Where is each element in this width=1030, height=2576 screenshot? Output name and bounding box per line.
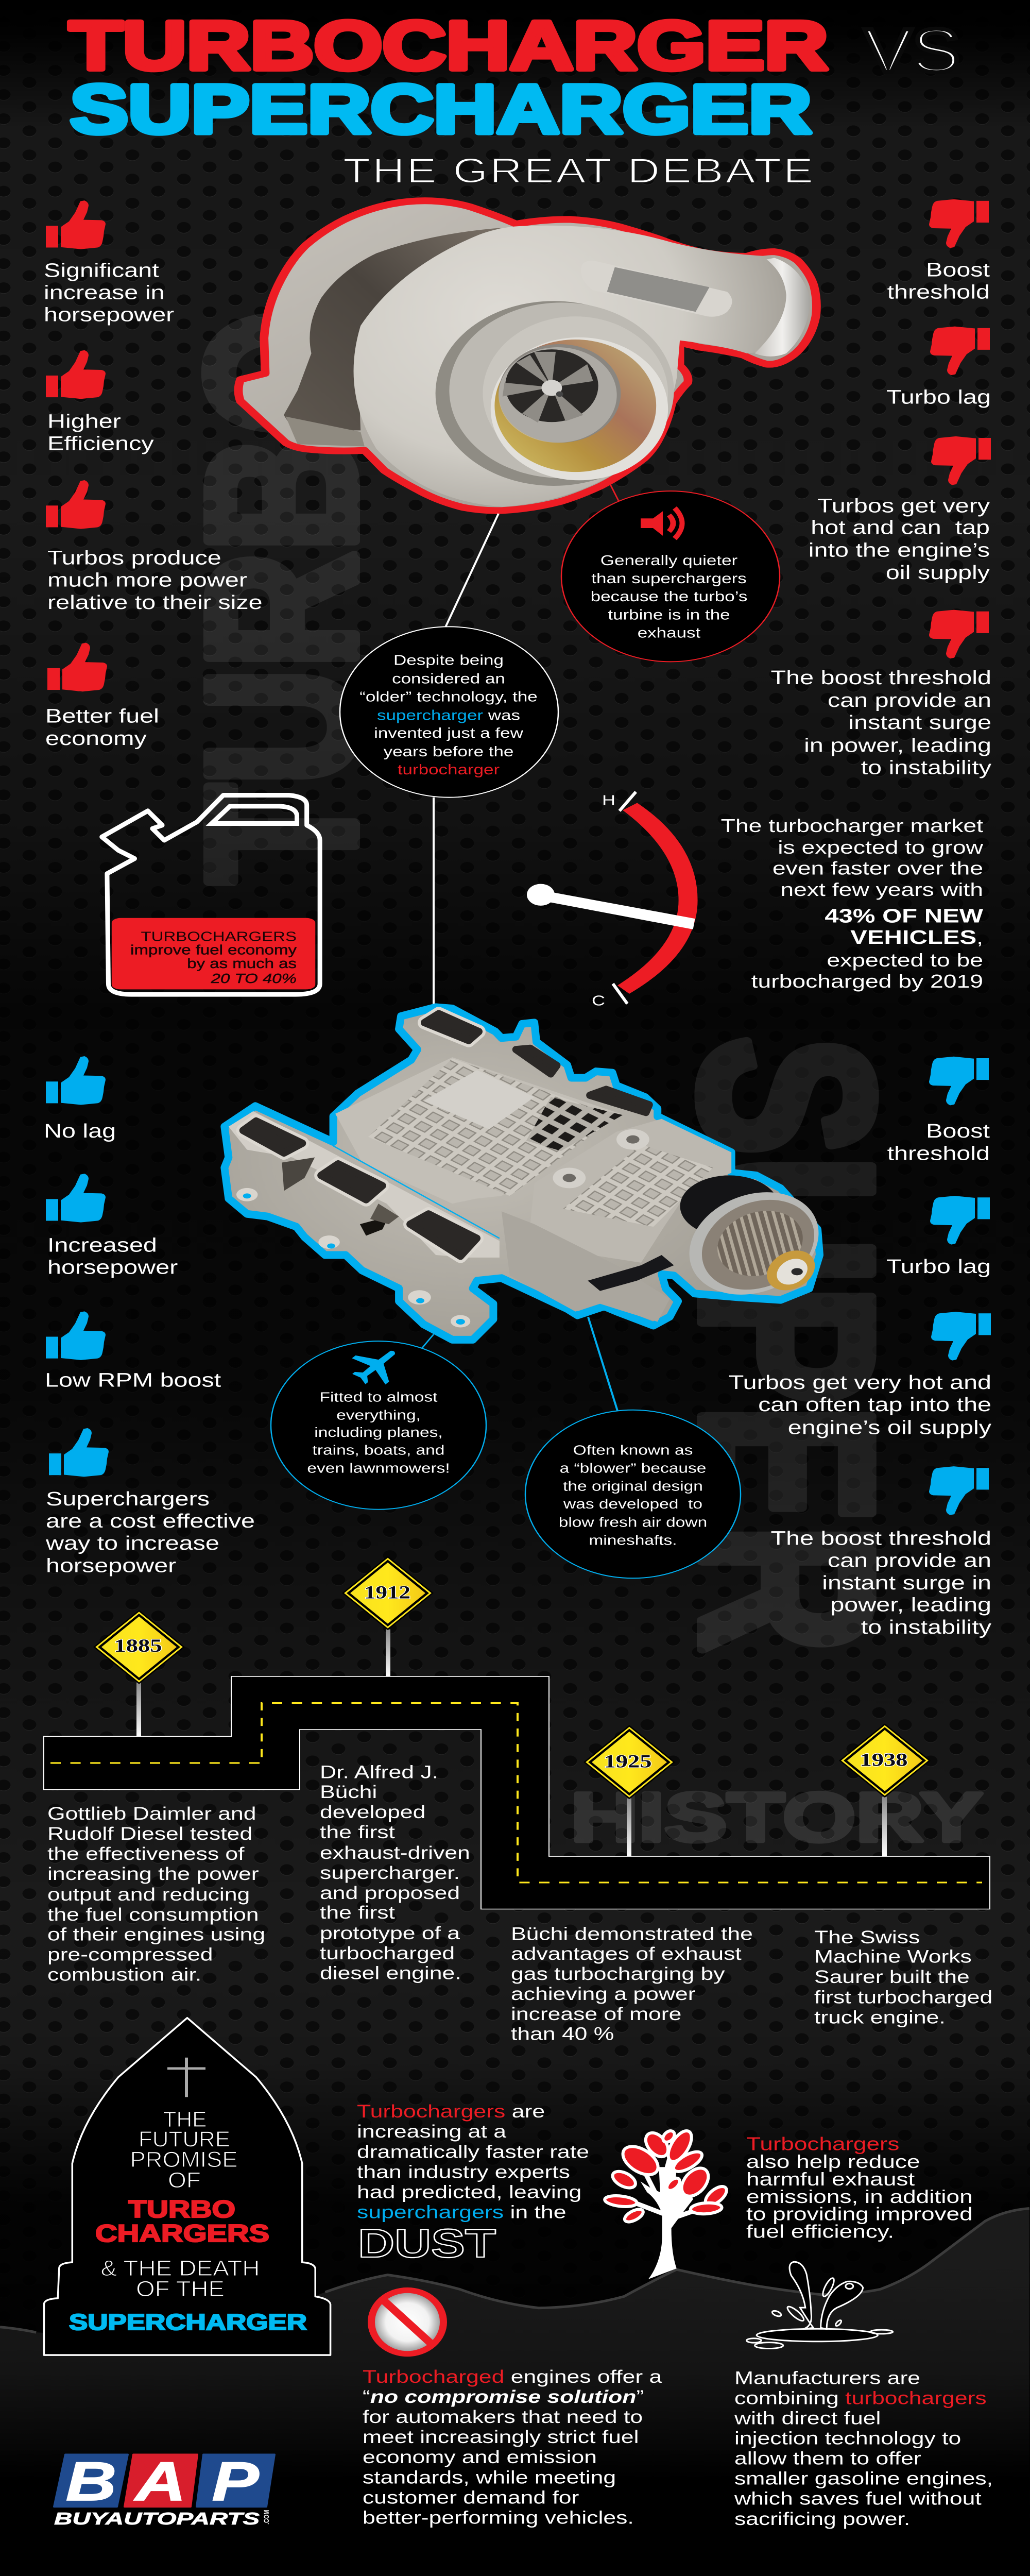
market growth text: 43% OF NEW	[825, 905, 984, 927]
callout text: older technology: “older” technology, the	[359, 689, 538, 705]
tombstone text: turbo chargers: CHARGERS	[95, 2220, 269, 2247]
icon: thumb down	[929, 199, 989, 248]
market growth text: The turbocharger market	[721, 815, 984, 836]
turbocharger photo illustration	[238, 201, 816, 511]
callout text: fitted: trains, boats, and	[313, 1443, 444, 1458]
tombstone	[44, 2018, 331, 2355]
gauge	[527, 792, 698, 1009]
history text: 1912: turbocharged	[320, 1944, 455, 1963]
fuel can text: by as much as	[187, 956, 297, 971]
panel: supercharger pros and cons	[44, 1056, 991, 1638]
text: turbochargers increasing: Turbochargers are	[357, 2102, 545, 2122]
milestone sign: 1885: 1885	[114, 1635, 162, 1656]
callout text: blower: was developed to	[563, 1497, 702, 1512]
icon: cross	[167, 2058, 205, 2097]
callout text: older technology: invented just a few	[374, 725, 523, 741]
text: direct injection: Manufacturers are	[734, 2368, 920, 2388]
history text: 1938: first turbocharged	[814, 1988, 992, 2007]
callout text: fitted: even lawnmowers!	[307, 1461, 450, 1476]
text: no compromise solution: better-performing vehicles.	[363, 2508, 634, 2528]
milestone sign: 1925: 1925	[604, 1751, 651, 1771]
text: no compromise solution: economy and emission	[363, 2448, 597, 2467]
intake ports	[243, 1013, 649, 1256]
callout text: older technology: Despite being	[393, 652, 504, 668]
history text: 1938: Machine Works	[814, 1947, 972, 1967]
callout text: blower: the original design	[563, 1479, 703, 1494]
intake port rims	[243, 1013, 479, 1256]
icon: thumb up	[46, 200, 106, 249]
market growth text: next few years with	[780, 879, 983, 900]
pro: increased horsepower: horsepower	[47, 1257, 178, 1278]
market growth text: turbocharged by 2019	[751, 971, 983, 992]
callout text: quieter: than superchargers	[591, 571, 747, 586]
icon: thumb down	[931, 436, 991, 485]
history text: 1925: increase of more	[511, 2005, 681, 2024]
text: direct injection: injection technology to	[734, 2429, 961, 2448]
text: reduce emissions: harmful exhaust	[746, 2169, 915, 2190]
callout text: older technology: supercharger was	[377, 707, 520, 723]
callout text: quieter: Generally quieter	[600, 552, 737, 568]
text: direct injection: with direct fuel	[734, 2409, 881, 2428]
milestone sign: 1912	[343, 1557, 433, 1676]
text: turbochargers increasing: had predicted, leaving	[357, 2182, 581, 2202]
supercharger photo illustration	[225, 1007, 840, 1340]
con: heat and oil: can often tap into the	[758, 1394, 991, 1416]
text: turbochargers increasing: than industry experts	[357, 2162, 570, 2182]
pro: cost effective: way to increase	[45, 1533, 219, 1554]
pro: horsepower: Significant	[44, 260, 159, 281]
fuel can text: 20 TO 40%	[211, 971, 297, 986]
pro: fuel economy: Better fuel	[45, 705, 159, 727]
con: heat and oil: Turbos get very	[817, 495, 990, 517]
callout text: blower: Often known as	[573, 1443, 693, 1458]
callout text: blower: mineshafts.	[589, 1533, 677, 1548]
text: direct injection: sacrificing power.	[734, 2509, 910, 2529]
text: no compromise solution: Turbocharged engines offer a	[363, 2367, 662, 2387]
pro: cost effective: horsepower	[46, 1555, 176, 1577]
history text: 1885: of their engines using	[47, 1925, 265, 1944]
con: boost threshold: threshold	[887, 1143, 990, 1164]
history text: 1912: and proposed	[320, 1883, 460, 1903]
text: turbochargers increasing: dramatically faster rate	[357, 2142, 589, 2162]
history text: 1912: Dr. Alfred J.	[320, 1762, 438, 1782]
con: heat and oil: hot and can tap	[811, 517, 990, 538]
line: turbo to history callout	[445, 514, 499, 627]
milestone sign: 1938	[840, 1724, 930, 1856]
market growth text: expected to be	[827, 950, 983, 971]
callout: fitted to almost everything	[271, 1338, 486, 1510]
icon: thumb down	[930, 327, 990, 375]
callout text: older technology: years before the	[384, 744, 513, 759]
icon: thumb up	[46, 480, 106, 529]
con: turbo lag: Turbo lag	[886, 1256, 991, 1278]
line: supercharger to fitted callout	[422, 1334, 434, 1348]
history text: 1885: combustion air.	[47, 1965, 201, 1985]
history text: 1912: developed	[320, 1802, 425, 1822]
pro: power to size: relative to their size	[47, 592, 263, 614]
pro: horsepower: increase in	[44, 282, 164, 303]
ghost word: HISTORY: HISTORY	[571, 1778, 983, 1856]
icon: thumb up	[46, 1056, 106, 1105]
text: turbochargers increasing: increasing at a	[357, 2122, 507, 2142]
icon: thumb down	[931, 1312, 991, 1361]
pro: efficiency: Efficiency	[47, 433, 154, 454]
con: instability: power, leading	[830, 1594, 991, 1616]
icon: thumb up	[49, 1428, 109, 1477]
text: reduce emissions: to providing improved	[746, 2204, 973, 2224]
text: no compromise solution: “no compromise solution”	[363, 2387, 644, 2407]
text: reduce emissions: also help reduce	[746, 2151, 920, 2172]
history text: 1938: truck engine.	[814, 2008, 946, 2027]
blower top	[335, 1057, 621, 1204]
icon: thumb down	[929, 1057, 989, 1105]
tombstone text: the future promise of: THE	[163, 2107, 207, 2132]
icon: thumb up	[47, 643, 107, 691]
con: boost threshold: threshold	[887, 282, 990, 303]
history text: 1885: Rudolf Diesel tested	[47, 1824, 252, 1844]
tombstone text: the death of the: OF THE	[136, 2277, 225, 2301]
callout text: blower: blow fresh air down	[559, 1515, 707, 1530]
history text: 1925: Büchi demonstrated the	[511, 1924, 753, 1944]
logo: BAP buyautoparts: B	[66, 2451, 116, 2513]
history text: 1885: increasing the power	[47, 1865, 259, 1884]
title: turbocharger: TURBOCHARGER	[69, 7, 828, 84]
icon: thumb down	[930, 1196, 990, 1245]
pro: fuel economy: economy	[45, 728, 147, 750]
line: turbo to quiet callout	[609, 481, 619, 501]
milestone sign: 1912: 1912	[364, 1582, 410, 1602]
callout: older technology	[340, 626, 558, 798]
tombstone text: the future promise of	[130, 2107, 237, 2193]
callout text: older technology: considered an	[392, 671, 505, 687]
con: heat and oil: Turbos get very hot and	[729, 1372, 991, 1394]
tombstone text: the future promise of: OF	[168, 2168, 201, 2193]
callout: blower	[525, 1410, 741, 1578]
history text: 1912: the first	[320, 1903, 395, 1923]
callout text: blower: a “blower” because	[560, 1461, 706, 1476]
icon: thumb down	[929, 1466, 989, 1515]
con: boost threshold: Boost	[926, 1121, 990, 1142]
icon: no symbol	[371, 2290, 443, 2354]
callout text: quieter: exhaust	[638, 625, 701, 641]
line: supercharger to blower callout	[588, 1317, 617, 1411]
history text: 1912: the first	[320, 1822, 395, 1842]
pulley	[680, 1175, 779, 1237]
callout: quieter	[561, 491, 780, 662]
icon: speaker	[641, 506, 685, 540]
logo: BAP buyautoparts: P	[212, 2451, 260, 2513]
title: supercharger: SUPERCHARGER	[70, 71, 812, 148]
callout text: quieter: because the turbo’s	[591, 589, 747, 604]
tombstone text: the future promise of: FUTURE	[139, 2127, 230, 2151]
text: no compromise solution: meet increasingly strict fuel	[363, 2428, 639, 2447]
text: turbochargers increasing: superchargers in the	[357, 2202, 566, 2222]
con: instability: can provide an	[828, 690, 991, 711]
market growth text: is expected to grow	[778, 837, 984, 858]
ground hill	[0, 2208, 1029, 2575]
subtitle: THE GREAT DEBATE	[343, 151, 813, 190]
tombstone text: the death of the: & THE DEATH	[100, 2256, 260, 2281]
con: instability: instant surge	[848, 712, 991, 734]
logo: BAP buyautoparts: BUYAUTOPARTS	[54, 2509, 260, 2529]
icon: tree	[603, 2130, 731, 2279]
con: instability: can provide an	[828, 1550, 991, 1571]
tombstone text: turbo chargers: TURBO	[128, 2196, 235, 2223]
pro: power to size: much more power	[47, 569, 247, 591]
text: direct injection: which saves fuel without	[734, 2489, 982, 2509]
logo: BAP buyautoparts: A	[133, 2451, 186, 2513]
con: instability: to instability	[861, 1617, 991, 1638]
icon: thumb up	[46, 350, 106, 399]
title	[69, 7, 960, 190]
market growth text: even faster over the	[772, 858, 983, 878]
icon: thumb down	[929, 610, 989, 658]
text: direct injection: combining turbochargers	[734, 2388, 987, 2408]
con: boost threshold: Boost	[926, 260, 990, 281]
milestone sign: 1938: 1938	[860, 1749, 907, 1770]
con: instability: to instability	[861, 757, 991, 778]
milestone sign: 1925	[585, 1726, 674, 1856]
pro: cost effective: are a cost effective	[46, 1511, 255, 1532]
icon: thumb up	[46, 1174, 106, 1223]
fuel can text: TURBOCHARGERS	[141, 929, 297, 944]
con: heat and oil: engine’s oil supply	[788, 1417, 991, 1438]
callout text: quieter: turbine is in the	[608, 607, 730, 622]
con: turbo lag: Turbo lag	[886, 387, 991, 408]
callout text: fitted: everything,	[336, 1408, 421, 1423]
title: vs: VS	[864, 16, 960, 85]
history text: 1912: prototype of a	[320, 1924, 460, 1943]
con: heat and oil: oil supply	[886, 562, 990, 584]
tombstone text: the death of the	[100, 2256, 260, 2301]
callout text: older technology: turbocharger	[398, 762, 500, 777]
con: instability: The boost threshold	[770, 1528, 991, 1549]
history text: 1912: Büchi	[320, 1782, 377, 1802]
history text: 1938: Saurer built the	[814, 1968, 970, 1987]
market growth text: VEHICLES,	[850, 926, 983, 948]
icon: oil splash	[747, 2262, 893, 2349]
text: direct injection: allow them to offer	[734, 2449, 921, 2468]
history text: 1925: advantages of exhaust	[511, 1944, 742, 1964]
pro: efficiency: Higher	[47, 411, 121, 432]
logo: BAP buyautoparts	[54, 2451, 274, 2529]
milestone sign: 1885	[94, 1611, 184, 1736]
history text: 1912: diesel engine.	[320, 1963, 461, 1983]
gauge label H: H	[602, 792, 615, 808]
text: no compromise solution: standards, while meeting	[363, 2468, 616, 2487]
pro: no lag: No lag	[44, 1121, 116, 1142]
callout text: fitted: Fitted to almost	[320, 1390, 438, 1404]
history text: 1885: output and reducing	[47, 1885, 250, 1905]
text: reduce emissions: Turbochargers	[746, 2133, 899, 2154]
history text: 1925: achieving a power	[511, 1985, 696, 2004]
pro: horsepower: horsepower	[44, 304, 174, 326]
text: no compromise solution: customer demand for	[363, 2488, 579, 2507]
icon: fuel can	[102, 795, 320, 994]
pro: cost effective: Superchargers	[46, 1488, 210, 1510]
text: reduce emissions: fuel efficiency.	[746, 2222, 894, 2242]
icon: airplane	[342, 1338, 411, 1392]
history text: 1885: Gottlieb Daimler and	[47, 1804, 256, 1824]
ghost word: SUPER: SUPER	[650, 1036, 923, 1653]
text: reduce emissions: emissions, in addition	[746, 2187, 973, 2207]
ghost word: TURBO: TURBO	[163, 310, 399, 884]
fuel can text: improve fuel economy	[130, 943, 297, 957]
text: direct injection: smaller gasoline engines,	[734, 2469, 993, 2488]
callout text: fitted: including planes,	[314, 1425, 443, 1440]
icon: thumb up	[46, 1311, 106, 1360]
pro: low rpm boost: Low RPM boost	[45, 1369, 221, 1391]
con: instability: instant surge in	[822, 1572, 991, 1594]
history text: 1885: pre-compressed	[47, 1945, 213, 1964]
gauge label C: C	[592, 992, 605, 1009]
history text: 1912: exhaust-driven	[320, 1843, 470, 1863]
timeline road	[44, 1676, 990, 1909]
con: heat and oil: into the engine’s	[809, 539, 990, 561]
con: instability: in power, leading	[804, 735, 991, 756]
manifold flange	[229, 1111, 500, 1258]
word: dust: DUST	[358, 2222, 496, 2266]
history text: 1925: than 40 %	[511, 2024, 614, 2044]
history text: 1938: The Swiss	[814, 1927, 920, 1947]
line: history callout to supercharger	[433, 798, 435, 1006]
tombstone text: supercharger: SUPERCHARGER	[69, 2310, 307, 2334]
text: no compromise solution: for automakers that need to	[363, 2408, 643, 2427]
history text: 1925: gas turbocharging by	[511, 1964, 725, 1984]
con: instability: The boost threshold	[770, 667, 991, 689]
tombstone text: the future promise of: PROMISE	[130, 2147, 237, 2172]
history text: 1912: supercharger.	[320, 1863, 460, 1883]
panel: turbocharger pros and cons	[44, 199, 991, 778]
logo: BAP buyautoparts: .COM	[263, 2510, 270, 2524]
history text: 1885: the effectiveness of	[47, 1844, 245, 1864]
tombstone text: turbo chargers	[95, 2196, 269, 2247]
pro: power to size: Turbos produce	[47, 547, 221, 569]
pro: increased horsepower: Increased	[47, 1235, 157, 1256]
history text: 1885: the fuel consumption	[47, 1905, 259, 1925]
